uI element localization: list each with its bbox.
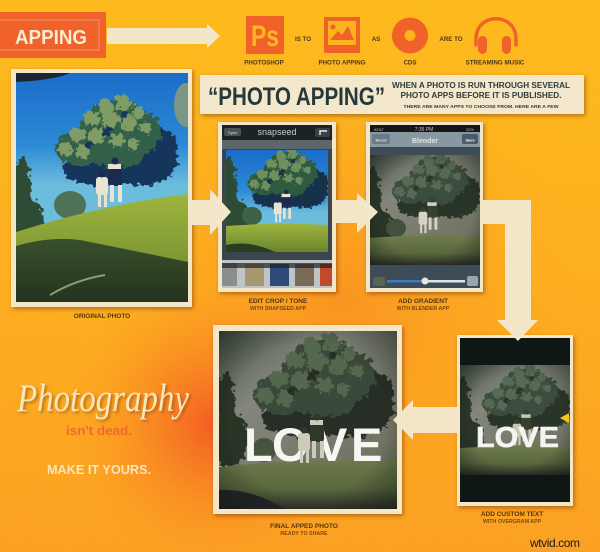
caption: blender: WITH BLENDER APP — [397, 306, 450, 312]
label: photoshop: PHOTOSHOP — [244, 60, 284, 66]
text overlay: LOVE: L — [244, 418, 273, 471]
slider — [373, 276, 478, 286]
photo: final — [212, 331, 397, 509]
status bar — [370, 125, 480, 133]
heading banner: APPING — [0, 12, 106, 58]
panel: snapseed phone — [214, 122, 336, 292]
filmstrip — [222, 260, 332, 288]
panel: overgram photo — [448, 335, 573, 506]
text: isn't dead: isn't dead. — [66, 424, 132, 438]
photo: blended — [370, 155, 480, 265]
tagline — [16, 377, 190, 477]
caption: final: FINAL APPED PHOTO — [270, 523, 338, 530]
icon: Photoshop — [246, 16, 284, 54]
photo: overgram — [460, 365, 570, 475]
script: photography: Photography — [16, 377, 190, 420]
caption: final: READY TO SHARE — [280, 531, 328, 537]
text: is to: IS TO — [295, 36, 311, 43]
arrow: snapseed to blender — [336, 193, 378, 233]
caption: blender: ADD GRADIENT — [398, 298, 448, 305]
definition text: WHEN A PHOTO IS RUN THROUGH SEVERAL — [392, 81, 570, 90]
black bands — [460, 338, 570, 502]
toolbar — [222, 140, 332, 149]
label: streaming music: STREAMING MUSIC — [466, 60, 525, 66]
arrow: heading to analogy — [107, 24, 220, 48]
heading banner: APPING: APPING — [15, 27, 87, 49]
app bar — [222, 125, 332, 140]
title banner — [200, 75, 584, 114]
icon: photo apping — [324, 17, 360, 53]
app bar: Open — [228, 130, 237, 135]
icon: CD — [392, 18, 428, 54]
text overlay: LOVE: E — [351, 418, 382, 471]
photo: snapseed crop — [226, 150, 328, 252]
status bar: AT&T — [374, 127, 385, 132]
text overlay: LOVE — [247, 428, 381, 462]
text: make it yours: MAKE IT YOURS. — [47, 463, 151, 477]
watermark: wtvid.com — [529, 536, 580, 550]
caption: snapseed: EDIT CROP / TONE — [249, 298, 308, 305]
text overlay: LOVE: LOVE — [476, 422, 559, 454]
nav bar — [370, 132, 480, 147]
status bar: 7:35 PM — [415, 127, 433, 133]
icon: headphones — [476, 19, 516, 54]
caption: overgram — [481, 511, 543, 525]
arrow: blender to overgram — [483, 200, 538, 341]
caption: overgram: ADD CUSTOM TEXT — [481, 511, 543, 518]
label: CDs: CDS — [403, 60, 417, 66]
panel: final photo — [212, 325, 402, 514]
text overlay: LOVE: V — [316, 418, 348, 471]
phone screen background — [222, 125, 332, 288]
status bar: 22% — [466, 127, 474, 132]
icon: yellow marker — [560, 413, 569, 423]
title: photo apping: “PHOTO APPING” — [208, 83, 385, 111]
nav bar: Blend — [375, 138, 387, 142]
photo: original — [8, 73, 198, 302]
panel: blender phone — [358, 122, 483, 292]
arrow: overgram to final — [393, 400, 457, 440]
caption: original photo: ORIGINAL PHOTO — [74, 313, 130, 320]
phone screen background — [370, 125, 480, 288]
text: are to: ARE TO — [439, 36, 463, 43]
caption: overgram: WITH OVERGRAM APP — [483, 519, 542, 525]
arrow: original to snapseed — [192, 189, 231, 235]
caption: snapseed: WITH SNAPSEED APP — [250, 306, 307, 312]
panel: original photo — [8, 69, 198, 307]
definition text: PHOTO APPS BEFORE IT IS PUBLISHED. — [400, 91, 562, 100]
nav bar: Blender — [412, 138, 438, 145]
caption: blender — [397, 298, 450, 312]
label: photo apping: PHOTO APPING — [318, 60, 366, 66]
icon: Photoshop: Ps — [251, 20, 279, 53]
app bar: snapseed — [257, 127, 297, 137]
text overlay: LOVE: O — [272, 418, 309, 471]
caption: snapseed — [249, 298, 308, 312]
nav bar: Save — [465, 138, 475, 142]
text: as: AS — [372, 36, 380, 43]
definition text — [392, 81, 570, 110]
definition text: THERE ARE MANY APPS TO CHOOSE FROM. HERE ARE A FEW — [404, 104, 559, 110]
caption: final — [270, 523, 338, 537]
analogy row — [244, 16, 525, 66]
